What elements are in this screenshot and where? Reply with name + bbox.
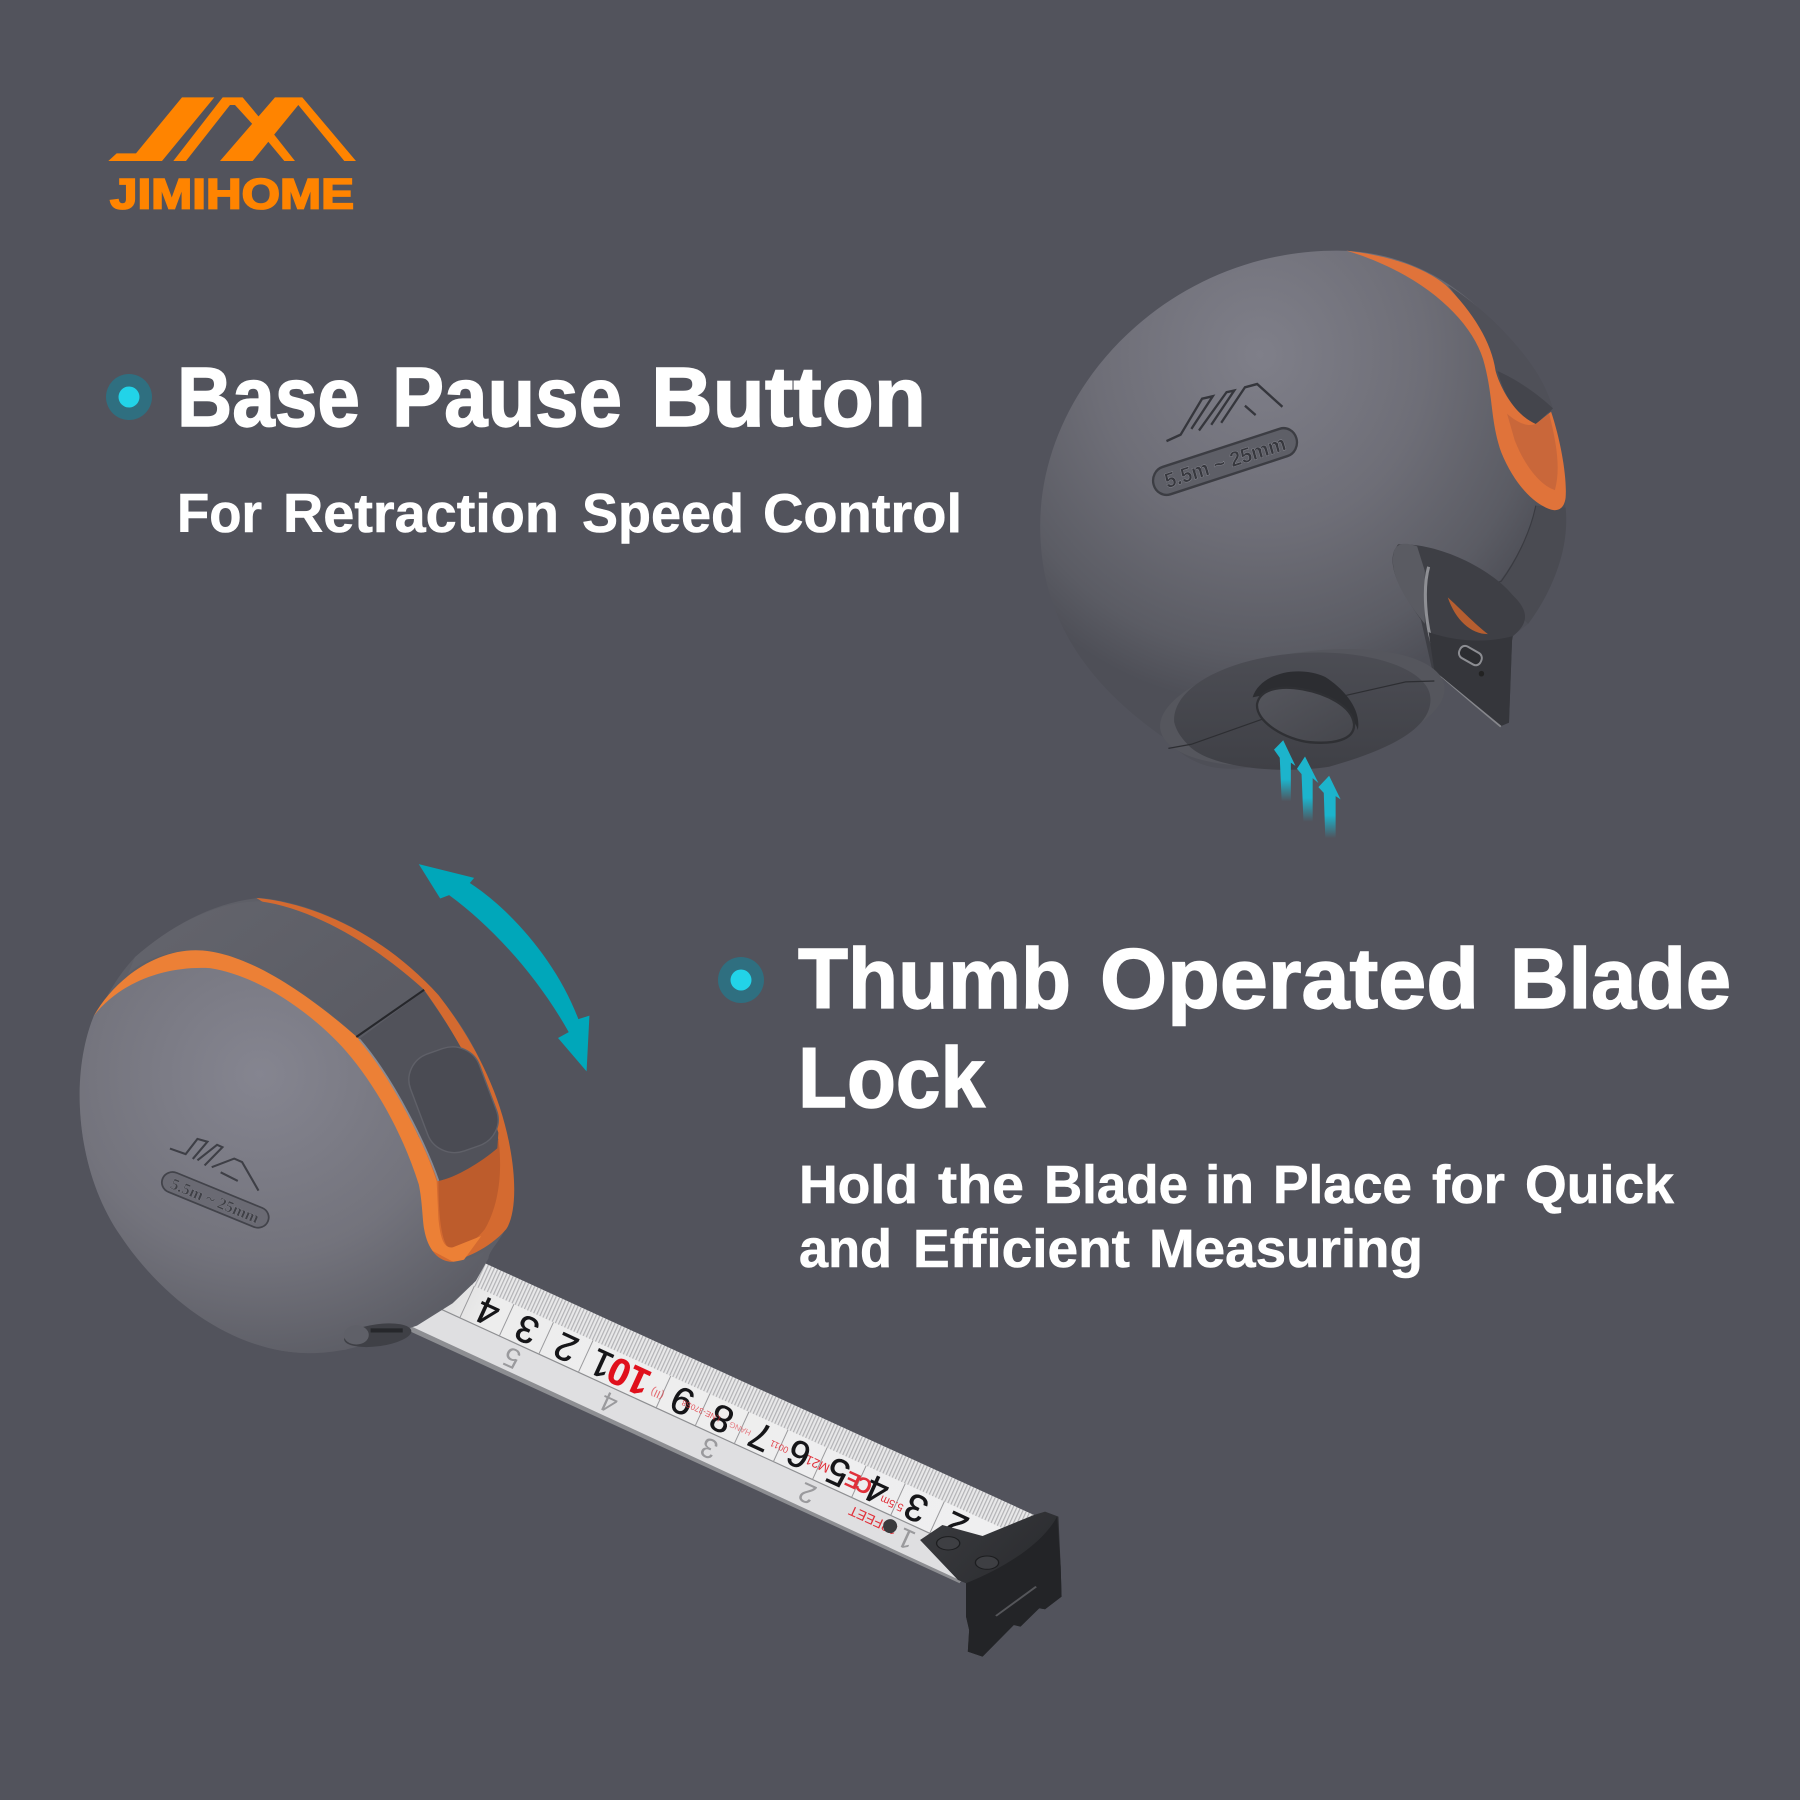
subheading: hold the blade: and (799, 1219, 892, 1279)
tape red markings: (II) (649, 1385, 666, 1401)
tape centimetre numbers: 6 (781, 1430, 818, 1477)
side dark panel (1494, 506, 1566, 624)
dark cap (1448, 285, 1553, 424)
subheading: hold the blade: Hold (799, 1155, 918, 1215)
tape mouth and hook (1393, 544, 1525, 726)
tape centimetre numbers: 4 (859, 1466, 896, 1513)
heading: Thumb Operated Blade Lock: Thumb (798, 932, 1071, 1027)
front orange band (94, 950, 481, 1265)
embossed size label: 5.5m ~ 25mm (1162, 432, 1289, 493)
tape inch numbers, faint: 5 (498, 1341, 525, 1375)
tape red markings: LNE-370S8 (680, 1398, 722, 1423)
subheading: retraction speed: Control (763, 482, 962, 544)
tape end hook (920, 1512, 1062, 1657)
logo: JIMIHOME (108, 97, 356, 218)
tape centimetre numbers: 9 (664, 1376, 701, 1423)
tape red markings: E (841, 1466, 865, 1495)
tape red markings: HANG (728, 1420, 753, 1437)
tape centimetre numbers: 2 (938, 1502, 975, 1549)
inner orange cup (438, 1140, 500, 1248)
subheading: retraction speed: Retraction (283, 482, 559, 544)
product photo: tape measure thumb lock view (80, 898, 514, 1353)
heading: Thumb Operated Blade Lock: Operated (1100, 932, 1479, 1027)
subheading: hold the blade: in (1205, 1155, 1254, 1215)
tape inch numbers, faint: 1 (893, 1521, 920, 1556)
tape centimetre numbers: 7 (743, 1412, 779, 1459)
heading: Thumb Operated Blade Lock: Blade (1510, 932, 1731, 1027)
heading: Thumb Operated Blade Lock: Lock (798, 1031, 986, 1126)
outer orange band (256, 898, 514, 1263)
engraved size label (159, 1169, 272, 1231)
tape centimetre numbers: 3 (898, 1484, 935, 1531)
tape inch numbers, faint: 2 (794, 1476, 821, 1511)
subheading: hold the blade: for (1432, 1155, 1505, 1215)
subheading: hold the blade: Quick (1525, 1155, 1675, 1215)
orange band (1346, 251, 1566, 510)
tape centimetre numbers: 4 (470, 1287, 507, 1334)
tape red markings: 18FEET (846, 1502, 900, 1539)
heading: Base Pause Button: Base (177, 350, 360, 444)
subheading: hold the blade (799, 1155, 1675, 1279)
heading: Base Pause Button: Button (651, 350, 926, 444)
arrows: press upward (1274, 740, 1341, 838)
logo: JIMIHOME: JIMIHOME (110, 170, 354, 218)
tape centimetre numbers: 3 (509, 1305, 546, 1352)
subheading: hold the blade: Efficient (913, 1219, 1130, 1279)
heading: Base Pause Button (177, 350, 926, 444)
engraved size label: 5.5m ~ 25mm (168, 1176, 262, 1227)
subheading: retraction speed: Speed (582, 482, 744, 544)
bullet: base pause button (106, 374, 152, 420)
tape centimetre numbers: 5 (820, 1448, 857, 1495)
silhouette (80, 898, 513, 1353)
subheading: retraction speed (177, 482, 962, 544)
subheading: hold the blade: Blade (1044, 1155, 1188, 1215)
product photo: tape measure base view (1040, 251, 1566, 783)
body ball (1040, 251, 1565, 769)
tape red markings: C (851, 1471, 876, 1500)
base pause button assembly (1153, 632, 1452, 783)
tape inch numbers, faint: 3 (696, 1431, 723, 1466)
tape mouth (343, 1320, 413, 1351)
heading: Thumb Operated Blade Lock (798, 932, 1731, 1126)
tape centimetre numbers: 8 (704, 1394, 740, 1441)
bullet: thumb lock (718, 957, 764, 1003)
sliding lock panel (356, 990, 506, 1181)
engraved logo (170, 1139, 258, 1191)
arrow: blade lock double curved (419, 864, 589, 1071)
subheading: retraction speed: For (177, 482, 262, 544)
embossed logo (1166, 384, 1282, 441)
tape centimetre numbers: 10 (601, 1347, 657, 1403)
tape centimetre numbers: 2 (548, 1323, 585, 1370)
tape red markings: M21 (803, 1452, 832, 1476)
tape red markings: 0011 (768, 1438, 790, 1455)
drum top (128, 901, 498, 1181)
subheading: hold the blade: the (938, 1155, 1024, 1215)
tape centimetre numbers (470, 1287, 975, 1549)
tape inch numbers, faint (498, 1341, 920, 1556)
product photo: extended tape blade (400, 1242, 1034, 1600)
front face (80, 968, 485, 1353)
heading: Base Pause Button: Pause (392, 350, 622, 444)
tape inch numbers, faint: 4 (596, 1385, 623, 1420)
tape red markings: 5.5m (878, 1492, 906, 1513)
tape centimetre numbers: 1 (584, 1339, 620, 1386)
subheading: hold the blade: Measuring (1149, 1219, 1423, 1279)
tape red markings (637, 1377, 913, 1539)
subheading: hold the blade: Place (1273, 1155, 1412, 1215)
